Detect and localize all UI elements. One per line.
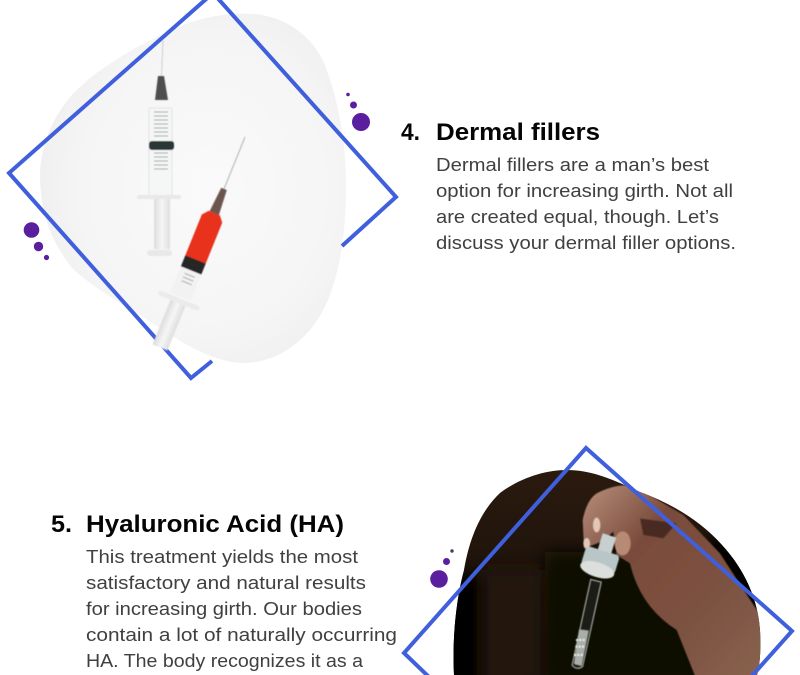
diamond outline (404, 448, 792, 675)
diamond outline (9, 0, 396, 378)
icon: syringe with red fluid (140, 129, 265, 356)
dropper glass tube (572, 579, 601, 668)
panel: dermal fillers illustration (9, 0, 396, 378)
body copy: option for increasing girth. Not all (436, 180, 733, 201)
body copy: for increasing girth. Our bodies (86, 598, 362, 619)
heading: 4. Dermal fillers: Dermal fillers (436, 119, 600, 146)
text block: hyaluronic acid (51, 511, 397, 671)
icon: syringe empty (137, 40, 181, 256)
body copy: Dermal fillers are a man’s best (436, 154, 709, 175)
heading: 5. Hyaluronic Acid (HA): Hyaluronic Acid (HA) (86, 511, 344, 538)
body copy: satisfactory and natural results (86, 572, 366, 593)
hand (572, 485, 763, 675)
decorative dots top right (346, 93, 370, 131)
body copy: are created equal, though. Let’s (436, 206, 719, 227)
heading: 4. Dermal fillers: 4. (401, 119, 420, 146)
body copy (436, 154, 736, 253)
body copy: HA. The body recognizes it as a (86, 650, 364, 671)
photo blob: hand holding dropper (454, 470, 760, 675)
text block: dermal fillers (401, 119, 736, 253)
photo blob: white paper background (40, 14, 346, 363)
body copy: contain a lot of naturally occurring (86, 624, 397, 645)
heading: 5. Hyaluronic Acid (HA): 5. (51, 511, 72, 538)
dropper cap (578, 545, 620, 582)
panel: hyaluronic acid illustration (404, 448, 792, 675)
body copy: discuss your dermal filler options. (436, 232, 736, 253)
decorative dots (430, 549, 454, 588)
body copy: This treatment yields the most (86, 546, 358, 567)
decorative dots left (24, 222, 49, 260)
body copy (86, 546, 397, 671)
